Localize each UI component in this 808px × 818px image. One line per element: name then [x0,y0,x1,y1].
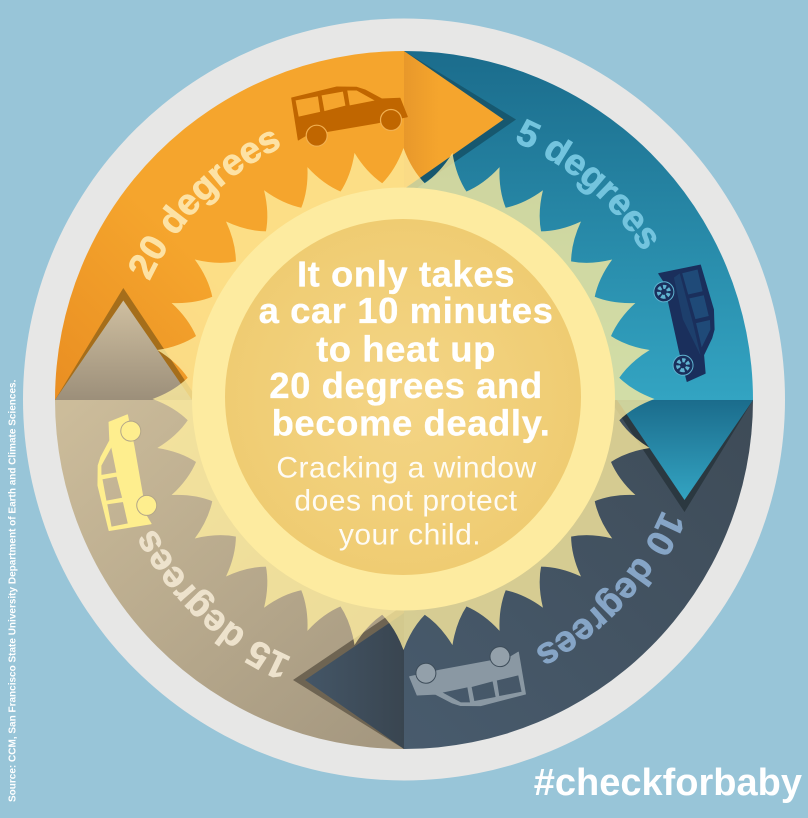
panel: 5 degrees quadrant [404,51,753,400]
headline: to heat up [316,328,496,370]
headline: become deadly. [272,402,550,444]
sun rays [152,148,654,650]
label: 20 degrees: 20 degrees [129,132,280,281]
arrow: dark into tan [293,605,404,749]
headline: 20 degrees and [269,365,543,406]
icon: grey van upside down [409,646,526,706]
sun ring [192,188,615,610]
arrow: tan into orange [55,288,198,400]
source note: Source: CCM, San Francisco State University Department of Earth and Climate Sciences. [8,379,18,802]
sun inner disc [225,219,581,575]
label: 5 degrees: 5 degrees [516,118,656,249]
panel: 15 degrees quadrant [55,400,404,749]
arrow: blue into dark [610,400,753,512]
icon: yellow van pointing up [98,415,157,531]
label: 15 degrees: 15 degrees [139,530,290,678]
arrow: orange into blue [404,51,516,197]
headline: It only takes [297,254,515,294]
label: 10 degrees: 10 degrees [537,511,682,664]
subtext: your child. [339,518,481,552]
headline: a car 10 minutes [259,290,553,331]
icon: orange van upright [292,87,407,146]
subtext: does not protect [294,484,518,518]
subtext: Cracking a window [276,452,537,484]
hashtag: #checkforbaby [534,762,802,804]
panel: 10 degrees quadrant [404,400,753,749]
icon: navy van tilted down [653,265,717,383]
panel: 20 degrees quadrant [55,51,404,400]
